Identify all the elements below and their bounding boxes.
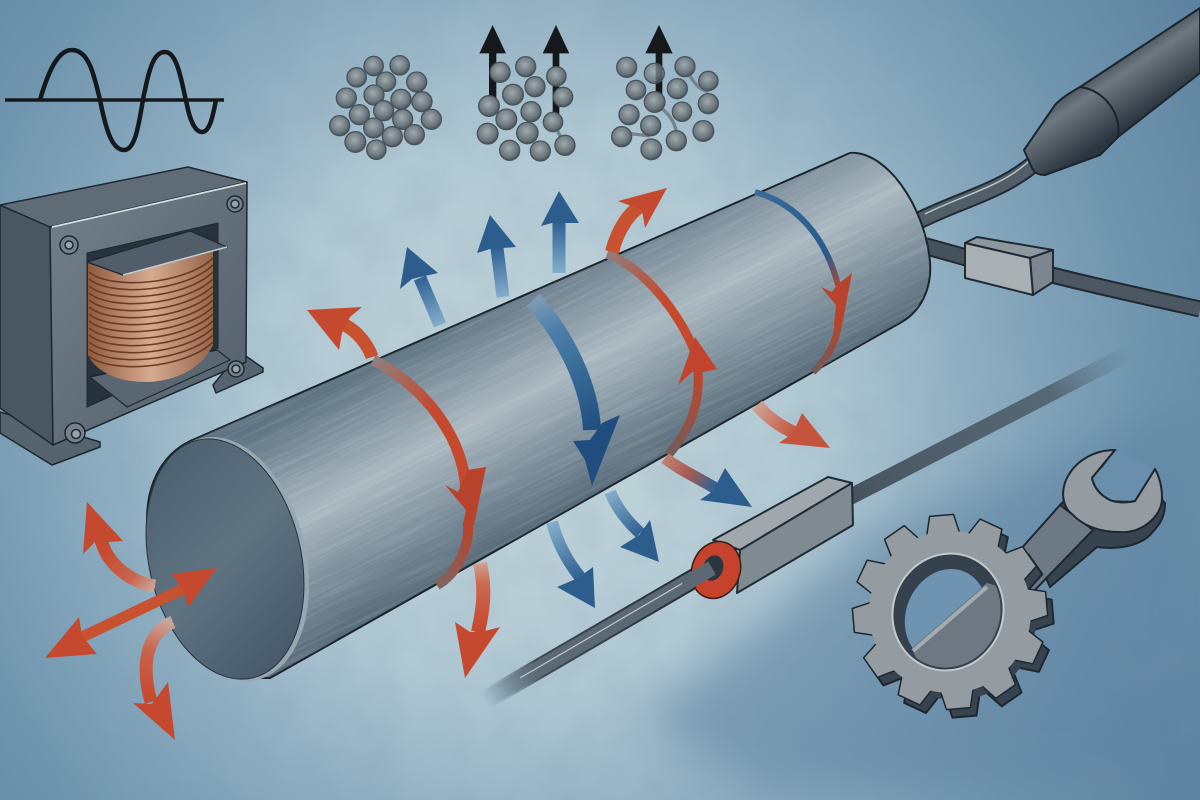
front frame — [50, 182, 247, 445]
lower sensor rod — [485, 350, 1135, 700]
upper cable and probe — [920, 8, 1200, 220]
lower cable with clamp block — [925, 237, 1200, 309]
gear hole — [892, 552, 1004, 672]
handle — [1020, 505, 1093, 595]
particle cluster — [612, 57, 718, 160]
particles: aligned domains with two arrows — [477, 25, 575, 161]
arrow: red double axial — [45, 568, 217, 658]
top face — [0, 167, 247, 227]
jaw notch — [1092, 450, 1155, 501]
wrench side — [1030, 450, 1165, 587]
arrow: blue up 2 — [477, 215, 516, 297]
copper coil — [88, 250, 213, 382]
arrow: red curved up — [83, 502, 155, 586]
arrow: red up left — [307, 307, 372, 357]
side face — [0, 205, 53, 445]
arrow: left black up — [479, 25, 506, 98]
band: red right — [607, 254, 717, 455]
arrow: red down right — [757, 405, 830, 448]
metal cylinder — [146, 152, 932, 681]
window — [87, 223, 218, 407]
arrow: red curved down — [133, 622, 175, 740]
arrow: right black up — [543, 25, 569, 115]
sensor block — [713, 477, 852, 550]
rod left — [485, 568, 712, 700]
icon: sine wave — [5, 50, 224, 150]
arrow: blue down 2 — [610, 492, 659, 562]
arrow: black up — [645, 25, 673, 95]
arrow: red down — [455, 563, 500, 678]
base plates — [0, 412, 100, 465]
wrench — [1020, 450, 1165, 595]
particles: random domains — [330, 56, 441, 159]
end chamfer — [126, 421, 332, 697]
band: blue and red far right — [755, 192, 852, 372]
arrow: blue down right 1 — [665, 458, 752, 507]
clamp block — [965, 237, 1053, 258]
rod right — [850, 350, 1135, 497]
arrow: blue up 1 — [400, 247, 440, 325]
band: blue centre — [533, 300, 620, 486]
gear and wrench — [852, 450, 1165, 718]
cylinder body — [147, 153, 930, 678]
rod end in ring — [683, 568, 712, 585]
bolts — [60, 196, 244, 443]
jaw face — [1063, 450, 1162, 532]
arrow: red up right — [612, 188, 667, 252]
gear face — [852, 514, 1048, 710]
band: red left — [373, 360, 486, 585]
end face — [124, 423, 326, 695]
top plate — [87, 231, 227, 275]
particle cluster — [477, 57, 575, 161]
gear shadow side — [867, 525, 1054, 718]
cable to probe — [920, 160, 1038, 220]
background shade lower right — [640, 400, 1195, 790]
particles: strained domains with one arrow — [612, 25, 718, 160]
icon: transformer — [0, 167, 263, 465]
red ring — [684, 535, 748, 605]
brushed texture — [149, 153, 930, 678]
arrow: blue down 3 — [552, 522, 595, 608]
probe handle — [1024, 8, 1200, 175]
arrow: blue up 3 — [541, 191, 579, 273]
bottom plate — [90, 350, 230, 407]
